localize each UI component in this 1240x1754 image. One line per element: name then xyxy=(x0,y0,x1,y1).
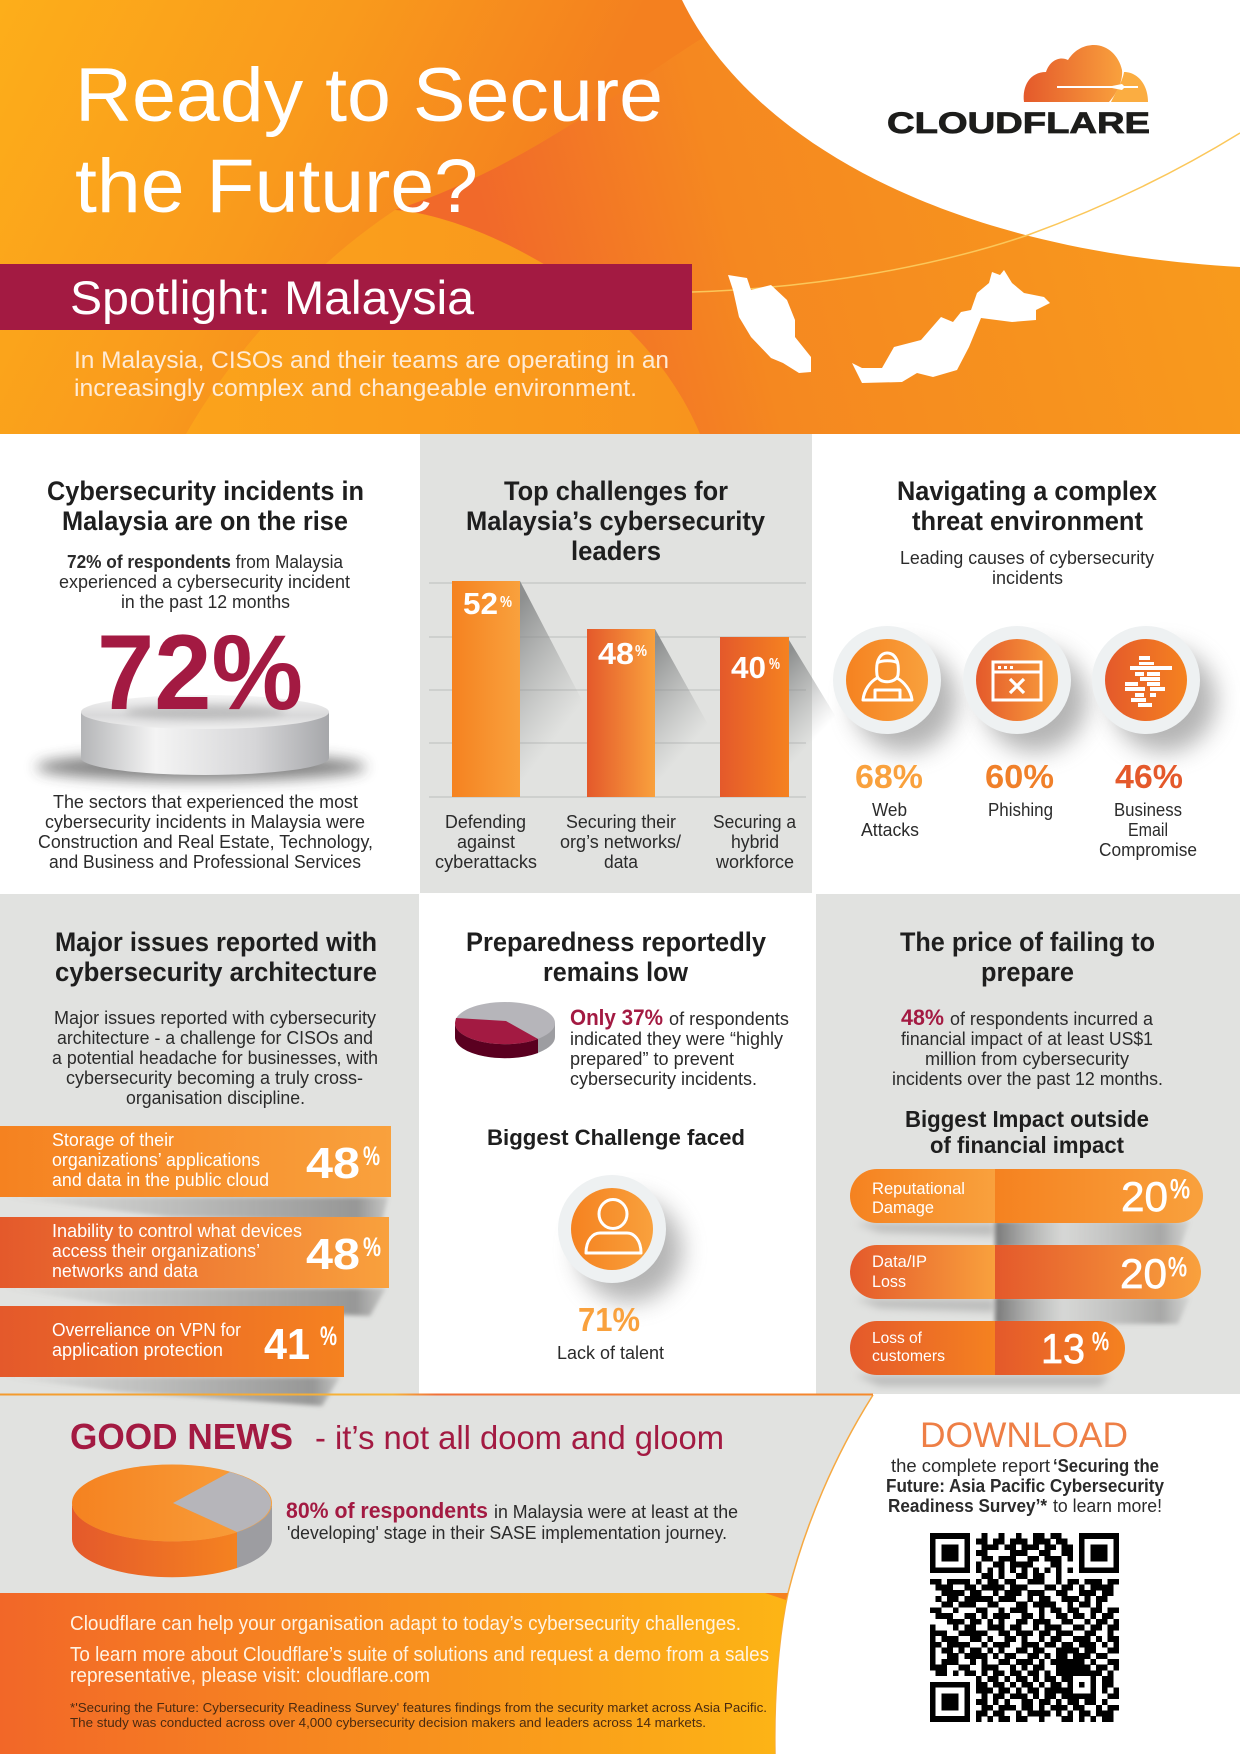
subheading xyxy=(905,1106,1149,1158)
icon: web attacks xyxy=(833,626,957,752)
text block: call to action: representative, please visit: cloudflare.com xyxy=(70,1665,430,1687)
footnote: The study was conducted across over 4,000 cybersecurity decision makers and leaders across 14 markets. xyxy=(70,1715,706,1730)
pill: data/IP loss 20%: Loss xyxy=(872,1272,906,1291)
text block: 72% of respondents: in the past 12 months xyxy=(121,592,290,612)
subheading xyxy=(900,548,1154,588)
bar labels: Defending xyxy=(445,812,526,832)
heading: leaders xyxy=(571,536,661,566)
panel: call to action footer xyxy=(0,1593,788,1754)
bar labels: hybrid xyxy=(731,832,779,852)
pill: reputational damage 20% xyxy=(850,1169,1203,1223)
text block: call to action xyxy=(70,1613,769,1687)
subheading: Biggest Impact outside xyxy=(905,1106,1149,1132)
footnote xyxy=(70,1700,767,1730)
text block: report description: Readiness Survey’* xyxy=(888,1496,1047,1516)
band: device control 48%: networks and data xyxy=(52,1261,199,1281)
band: device control 48%: 48 xyxy=(306,1230,360,1279)
text block: report description xyxy=(886,1456,1164,1516)
band: device control 48% xyxy=(0,1217,389,1288)
band: VPN overreliance 41%: Overreliance on VPN for xyxy=(52,1320,241,1340)
heading: Malaysia’s cybersecurity xyxy=(466,506,765,536)
panel: top challenges xyxy=(420,434,850,893)
intro text: increasingly complex and changeable environment. xyxy=(74,375,637,402)
panel: download xyxy=(886,1416,1164,1722)
bar: 48%: % xyxy=(635,643,647,660)
stat: 46% business email compromise: Compromise xyxy=(1099,840,1197,860)
text block: 48% of respondents: million from cybersecurity xyxy=(925,1049,1129,1069)
heading xyxy=(70,1416,724,1457)
band: public cloud 48% xyxy=(0,1126,391,1197)
text block: report description: the complete report xyxy=(891,1456,1050,1476)
stat: 71% lack of talent xyxy=(557,1301,664,1363)
bar labels: org’s networks/ xyxy=(560,832,681,852)
spotlight banner xyxy=(0,264,692,330)
pill: loss of customers 13%: % xyxy=(1092,1328,1109,1356)
text block: sectors xyxy=(38,792,373,872)
stat: 60% phishing: 60% xyxy=(985,758,1054,795)
icon: map of Malaysia xyxy=(728,270,1050,383)
stat: 68% web attacks: 68% xyxy=(855,758,923,795)
panel: price of failing to prepare xyxy=(816,894,1240,1394)
bar labels: workforce xyxy=(715,852,794,872)
pill: data/IP loss 20%: % xyxy=(1168,1252,1187,1282)
bar: 52%: 52 xyxy=(463,586,498,621)
heading: Major issues reported with xyxy=(55,927,377,957)
panel: good news xyxy=(0,1395,873,1754)
band: public cloud 48%: 48 xyxy=(306,1139,360,1188)
band: device control 48%: % xyxy=(363,1232,381,1262)
text block: sectors: and Business and Professional Services xyxy=(49,852,361,872)
pill: reputational damage 20%: Reputational xyxy=(872,1179,965,1198)
text block: only 37%: Only 37% xyxy=(570,1005,663,1030)
QR code xyxy=(930,1533,1119,1722)
heading: Top challenges for xyxy=(504,476,728,506)
stat: 71% lack of talent: Lack of talent xyxy=(557,1343,664,1363)
text block: 48% of respondents: of respondents incurred a xyxy=(950,1009,1154,1029)
panel: navigating a complex threat environment xyxy=(833,476,1216,860)
stat: 68% web attacks: Web xyxy=(872,800,907,820)
band: device control 48%: access their organizations’ xyxy=(52,1241,260,1261)
heading: GOOD NEWS xyxy=(70,1416,293,1457)
text block: 72% of respondents: experienced a cybersecurity incident xyxy=(59,572,350,592)
pie chart: 37% xyxy=(455,1002,555,1058)
pie chart: 80% xyxy=(72,1464,272,1577)
subheading: incidents xyxy=(992,568,1063,588)
bar labels: data xyxy=(604,852,639,872)
stat: 46% business email compromise: Business xyxy=(1114,800,1182,820)
text block: report description: Future: Asia Pacific Cybersecurity xyxy=(886,1476,1164,1496)
header banner xyxy=(0,0,1240,434)
text block: description xyxy=(52,1008,378,1108)
bar labels: Securing their xyxy=(566,812,676,832)
bar chart xyxy=(429,581,850,797)
text block: 48% of respondents: 48% xyxy=(901,1005,944,1030)
stat: 68% web attacks: Attacks xyxy=(861,820,919,840)
heading: Cybersecurity incidents in xyxy=(47,476,364,506)
pill: data/IP loss 20%: Data/IP xyxy=(872,1252,927,1271)
bar: 40%: 40 xyxy=(731,650,766,685)
pill: reputational damage 20%: % xyxy=(1170,1174,1190,1204)
bar: 40% xyxy=(720,637,789,797)
text block: 48% of respondents xyxy=(892,1005,1163,1089)
logo: Cloudflare xyxy=(887,45,1150,140)
heading: prepare xyxy=(981,957,1074,987)
text block: 80% of respondents: 80% of respondents xyxy=(286,1498,488,1523)
pill: loss of customers 13%: 13 xyxy=(1041,1325,1085,1372)
heading xyxy=(55,927,377,987)
text block: 72% of respondents xyxy=(59,552,350,612)
text block: only 37%: prepared” to prevent xyxy=(570,1049,734,1069)
text block: call to action: To learn more about Cloudflare’s suite of solutions and request a demo from a sales xyxy=(70,1644,769,1666)
text block: only 37%: of respondents xyxy=(669,1009,789,1029)
bar: 48%: 48 xyxy=(598,636,634,671)
stat: 46% business email compromise: 46% xyxy=(1115,758,1183,795)
text block: report description: ‘Securing the xyxy=(1053,1456,1159,1476)
heading: - it’s not all doom and gloom xyxy=(315,1419,724,1456)
heading: The price of failing to xyxy=(900,927,1155,957)
stat: 46% business email compromise: Email xyxy=(1128,820,1168,840)
band: VPN overreliance 41%: % xyxy=(320,1321,337,1351)
icon: podium xyxy=(36,695,366,781)
bar labels: cyberattacks xyxy=(435,852,537,872)
stat: 46% business email compromise xyxy=(1099,758,1197,860)
text block: description: architecture - a challenge for CISOs and xyxy=(57,1028,373,1048)
stat: 68% web attacks xyxy=(855,758,923,840)
heading: DOWNLOAD xyxy=(920,1416,1128,1455)
heading: Preparedness reportedly xyxy=(466,927,766,957)
text block: 80% of respondents xyxy=(286,1498,738,1543)
icon: phishing xyxy=(963,626,1087,752)
bar labels: Securing a xyxy=(713,812,797,832)
text block: only 37% xyxy=(570,1005,789,1089)
band: public cloud 48%: Storage of their xyxy=(52,1130,174,1150)
text block: description: Major issues reported with cybersecurity xyxy=(54,1008,376,1028)
intro text: In Malaysia, CISOs and their teams are operating in an xyxy=(74,347,669,374)
panel: cybersecurity incidents on the rise xyxy=(36,476,373,872)
subheading: Leading causes of cybersecurity xyxy=(900,548,1154,568)
stat: 60% phishing xyxy=(985,758,1054,820)
pill: reputational damage 20%: 20 xyxy=(1121,1173,1168,1220)
intro text xyxy=(74,347,669,402)
text block: sectors: Construction and Real Estate, Technology, xyxy=(38,832,373,852)
main title xyxy=(75,53,663,229)
pill: loss of customers 13%: Loss of xyxy=(872,1330,923,1347)
footnote: *'Securing the Future: Cybersecurity Readiness Survey' features findings from the security market across Asia Pacific. xyxy=(70,1700,767,1715)
pill: reputational damage 20%: Damage xyxy=(872,1198,934,1217)
heading: Navigating a complex xyxy=(897,476,1157,506)
text block: report description: to learn more! xyxy=(1053,1496,1162,1516)
heading xyxy=(466,476,765,566)
band: VPN overreliance 41% xyxy=(0,1306,344,1377)
icon: business email compromise xyxy=(1092,626,1216,752)
heading xyxy=(900,927,1155,987)
heading: remains low xyxy=(543,957,688,987)
text block: 80% of respondents: 'developing' stage in their SASE implementation journey. xyxy=(287,1523,727,1543)
heading: cybersecurity architecture xyxy=(55,957,377,987)
bar: 52%: % xyxy=(500,594,512,611)
main title: the Future? xyxy=(75,144,478,229)
band: device control 48%: Inability to control what devices xyxy=(52,1221,302,1241)
heading: threat environment xyxy=(912,506,1143,536)
pill: data/IP loss 20% xyxy=(850,1245,1201,1299)
band: VPN overreliance 41%: 41 xyxy=(264,1320,310,1369)
bar labels xyxy=(435,812,797,872)
spotlight banner: Spotlight: Malaysia xyxy=(70,271,475,324)
bar: 40%: % xyxy=(769,656,780,673)
stat: 71% lack of talent: 71% xyxy=(578,1301,640,1338)
panel: major issues xyxy=(0,894,419,1406)
text block: only 37%: cybersecurity incidents. xyxy=(570,1069,757,1089)
band: public cloud 48%: % xyxy=(363,1141,380,1171)
text block: 48% of respondents: financial impact of at least US$1 xyxy=(901,1029,1153,1049)
heading xyxy=(897,476,1157,536)
text block: call to action: Cloudflare can help your organisation adapt to today’s cybersecurity challenges. xyxy=(70,1613,741,1635)
heading xyxy=(466,927,766,987)
stat: 60% phishing: Phishing xyxy=(988,800,1053,820)
text block: sectors: The sectors that experienced the most xyxy=(53,792,358,812)
bar: 52% xyxy=(452,581,520,797)
subheading: of financial impact xyxy=(930,1132,1124,1158)
band: public cloud 48%: and data in the public cloud xyxy=(52,1170,269,1190)
text block: description: cybersecurity becoming a truly cross- xyxy=(66,1068,363,1088)
pill: data/IP loss 20%: 20 xyxy=(1120,1250,1167,1297)
bar: 48% xyxy=(587,629,655,797)
text block: 72% of respondents: 72% of respondents from Malaysia xyxy=(67,552,344,572)
text block: 80% of respondents: in Malaysia were at least at the xyxy=(494,1502,738,1522)
main title: Ready to Secure xyxy=(75,53,663,138)
band: public cloud 48%: organizations’ applications xyxy=(52,1150,260,1170)
text block: description: a potential headache for businesses, with xyxy=(52,1048,378,1068)
logo: Cloudflare: CLOUDFLARE xyxy=(887,107,1150,140)
big number 72%: 72% xyxy=(97,612,303,732)
text block: description: organisation discipline. xyxy=(126,1088,305,1108)
heading xyxy=(47,476,364,536)
text block: 48% of respondents: incidents over the past 12 months. xyxy=(892,1069,1163,1089)
heading: Malaysia are on the rise xyxy=(62,506,348,536)
text block: sectors: cybersecurity incidents in Malaysia were xyxy=(45,812,365,832)
text block: only 37%: indicated they were “highly xyxy=(570,1029,783,1049)
bar labels: against xyxy=(457,832,515,852)
subheading: Biggest Challenge faced xyxy=(487,1125,745,1150)
pill: loss of customers 13%: customers xyxy=(872,1348,945,1365)
pill: loss of customers 13% xyxy=(850,1321,1125,1375)
icon: lack of talent xyxy=(558,1175,682,1302)
band: VPN overreliance 41%: application protection xyxy=(52,1340,223,1360)
panel: preparedness xyxy=(455,927,789,1363)
